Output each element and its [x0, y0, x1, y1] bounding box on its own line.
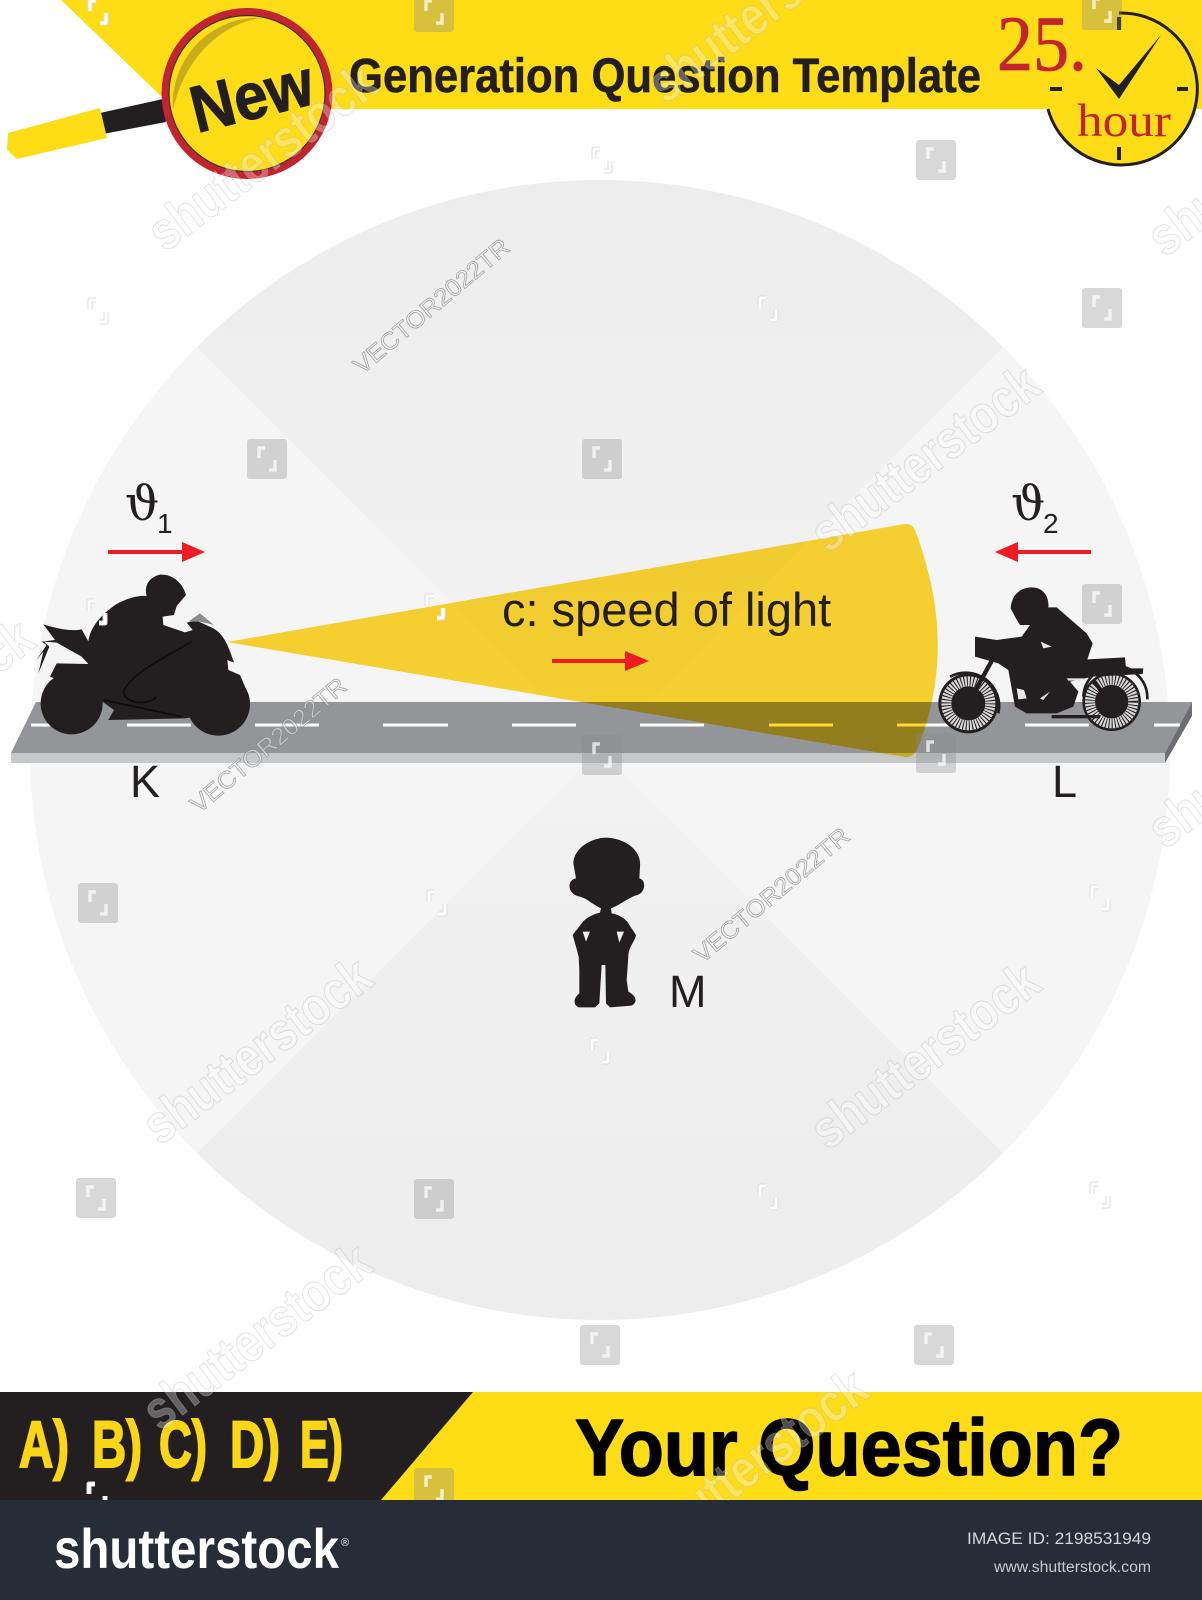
answer options: C): [159, 1407, 207, 1481]
black answers panel: [0, 1392, 473, 1500]
speed label v1: [125, 476, 173, 539]
label K: K: [130, 756, 160, 807]
shutterstock logo: ®: [341, 1537, 349, 1549]
answer options: A): [19, 1407, 69, 1481]
arrow: light direction: [552, 651, 649, 671]
watermarks: shutterstock: [799, 950, 1051, 1161]
image id: IMAGE ID: 2198531949: [967, 1529, 1151, 1548]
road: [11, 702, 1192, 763]
label L: L: [1052, 756, 1077, 807]
icon: magnifying glass with New: New: [182, 45, 321, 147]
icon: clock with 25. hour: hour: [1077, 95, 1171, 147]
header banner: [7, 0, 1202, 176]
rear wheel: [1082, 672, 1141, 731]
motorcycle L silhouette: [938, 587, 1147, 733]
light beam: [227, 524, 938, 757]
watermarks: VECTOR2022TR: [186, 673, 352, 819]
yellow bar: [381, 1392, 1202, 1500]
answer options: E): [300, 1407, 343, 1481]
watermarks: shutterstock: [799, 353, 1051, 564]
answer options: B): [92, 1407, 142, 1481]
icon: clock with 25. hour: 25.: [997, 0, 1087, 87]
watermarks: shutterstock: [627, 1357, 879, 1568]
front wheel: [938, 673, 998, 733]
background circle with wedges: [30, 180, 1170, 1320]
speed label v1: 1: [157, 508, 173, 539]
icon: magnifying glass with New: [7, 12, 329, 176]
speed label v2: ϑ: [1011, 476, 1045, 532]
footer bar: [0, 1500, 1202, 1600]
arrow: v2 direction: [995, 542, 1091, 562]
watermarks: shutterstock: [131, 1231, 383, 1442]
boy M silhouette: [569, 838, 644, 1007]
arrow: v1 direction: [108, 542, 205, 562]
answer options: [19, 1407, 343, 1481]
yellow header band: [61, 0, 1202, 109]
motorcycle K silhouette: [36, 575, 250, 736]
question text: Your Question?: [575, 1403, 1123, 1492]
speed label v2: 2: [1043, 508, 1059, 539]
label M: M: [669, 966, 706, 1017]
header title: Generation Question Template: [349, 50, 981, 103]
icon: clock with 25. hour: [997, 0, 1199, 165]
watermarks: VECTOR2022TR: [689, 823, 855, 969]
speed label v2: [1011, 476, 1059, 539]
website: www.shutterstock.com: [993, 1559, 1151, 1576]
watermarks: VECTOR2022TR: [349, 234, 515, 380]
answer options: D): [230, 1407, 280, 1481]
watermarks: shutterstock: [136, 52, 388, 263]
shutterstock logo: shutterstock: [54, 1517, 340, 1580]
bottom question bar: [0, 1392, 1202, 1500]
speed label v1: ϑ: [125, 476, 159, 532]
label: speed of light: c: speed of light: [502, 583, 831, 636]
watermarks: shutterstock: [131, 945, 383, 1156]
